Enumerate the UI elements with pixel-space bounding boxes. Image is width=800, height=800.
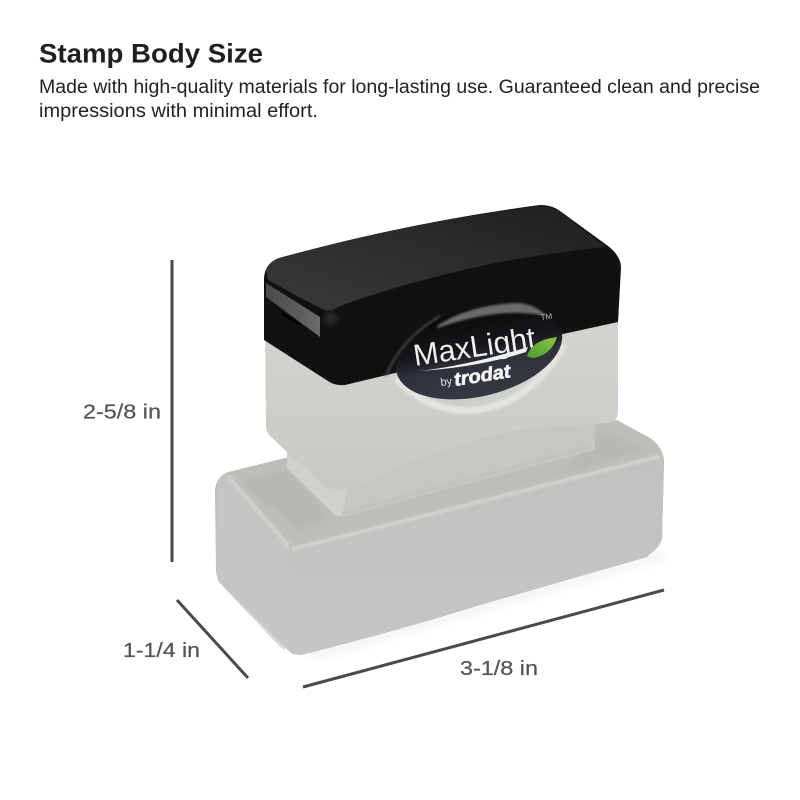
neck plinth [287, 452, 347, 517]
description text: Made with high-quality materials for long-lasting use. Guaranteed clean and precise [39, 77, 760, 98]
body highlight around badge [396, 345, 564, 410]
cap silhouette [264, 205, 621, 385]
base silhouette and top face [215, 420, 664, 654]
top face shading [240, 470, 330, 530]
trodat logo text: trodat [452, 361, 513, 391]
badge curved rim [386, 316, 440, 376]
width dimension line [303, 590, 664, 687]
icon: leaf [527, 337, 557, 358]
base left face [216, 477, 295, 655]
description text: impressions with minimal effort. [39, 101, 318, 122]
depth dimension line [177, 600, 248, 678]
base highlights [228, 456, 660, 549]
cap top face [266, 206, 606, 312]
base rubber plate [217, 578, 287, 650]
base front face [289, 457, 664, 655]
title: Stamp Body Size [39, 38, 263, 68]
height dimension line [170, 260, 174, 562]
badge oval [386, 289, 572, 415]
badge gloss [437, 303, 546, 328]
swoosh [420, 347, 528, 371]
cap side slot [282, 312, 300, 326]
height label: 2-5/8 in [83, 400, 161, 424]
trademark: TM [540, 311, 553, 322]
description text [39, 77, 760, 122]
cap side band [266, 283, 320, 337]
stamp neck [287, 415, 595, 517]
by: by [440, 375, 453, 389]
stamp illustration [215, 205, 668, 660]
stamp base [215, 420, 664, 655]
black cap [264, 205, 621, 385]
width label: 3-1/8 in [460, 657, 538, 680]
stamp shadow [300, 550, 668, 660]
depth label: 1-1/4 in [123, 639, 200, 662]
MaxLight badge [386, 289, 572, 415]
cap front corner knob [322, 310, 340, 328]
stamp grey body [265, 310, 618, 490]
brand name: MaxLight [411, 321, 538, 373]
